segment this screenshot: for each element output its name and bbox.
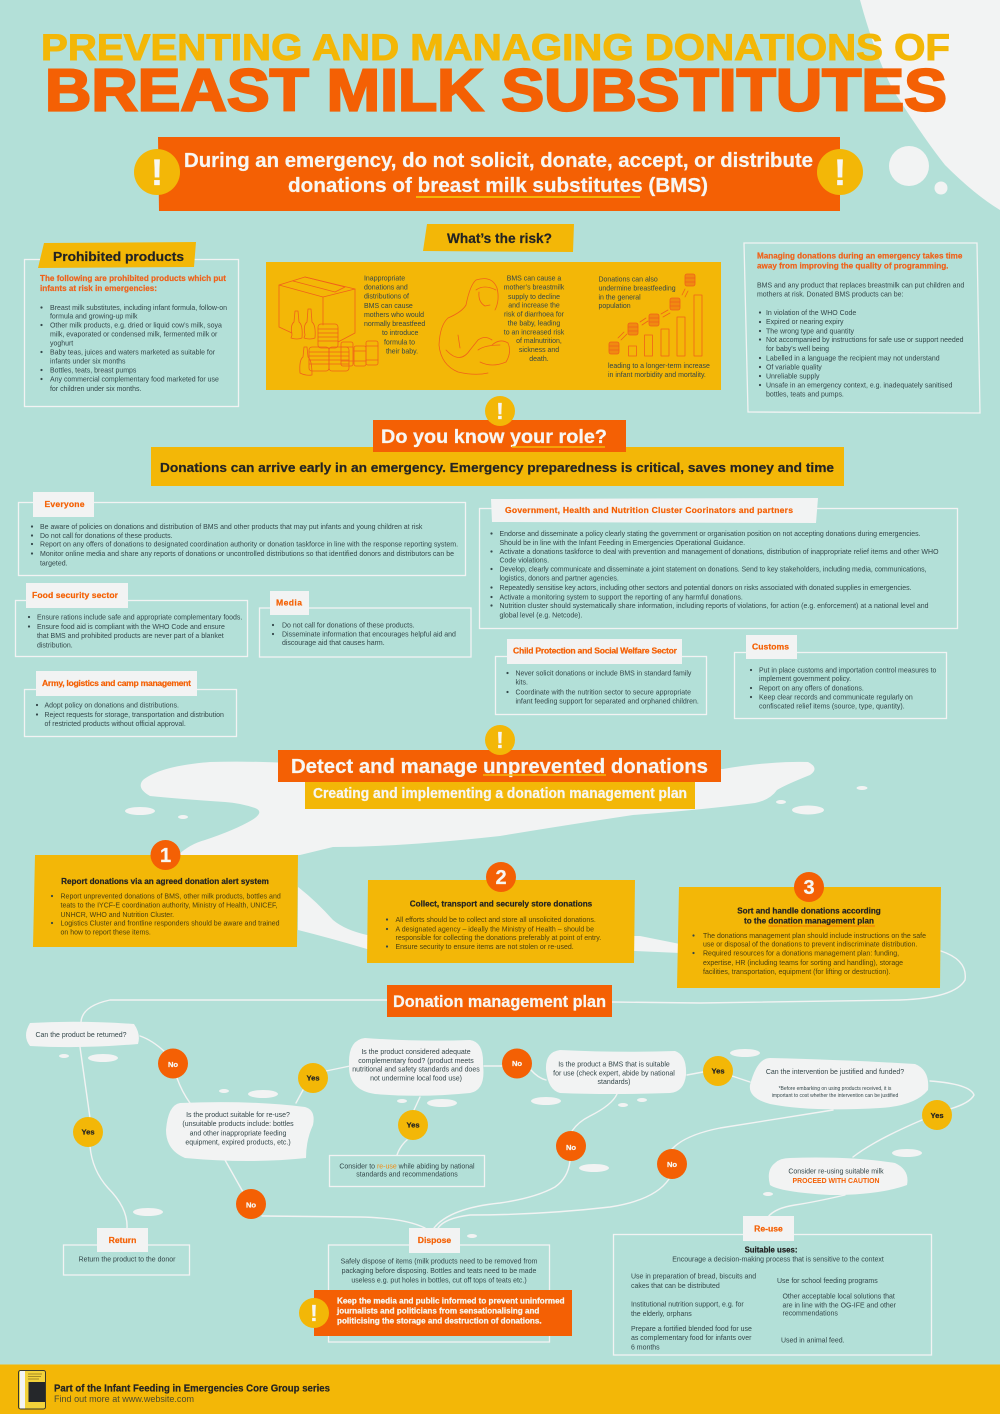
managing donations list: Labelled in a language the recipient may not understand <box>766 356 940 362</box>
panel: government and cluster coordinators: Nutrition cluster should systematically share information, including reports of violations, for action (e.g. enforcement) at a national level and <box>500 603 929 610</box>
panel: media: Disseminate information that encourages helpful aid and <box>282 632 456 638</box>
callout: keep media and public informed <box>299 1290 572 1336</box>
step 3: Required resources for a donations management plan: funding, <box>703 950 899 958</box>
decision nodes: no circles: No <box>512 1059 522 1068</box>
managing donations list <box>759 310 964 398</box>
managing donations heading: Managing donations during an emergency takes time <box>757 252 963 260</box>
panel: army, logistics and camp management: of restricted products without official approval. <box>44 721 186 728</box>
outcome: re-use: Other acceptable local solutions that <box>782 1294 895 1300</box>
panel: food security sector: Food security sector <box>32 590 119 600</box>
risk text 1: normally breastfeed <box>364 321 425 328</box>
decision: suitable for re-use: and other inappropriate feeding <box>190 1130 287 1138</box>
title: PREVENTING AND MANAGING DONATIONS OF <box>41 27 950 68</box>
decision nodes: yes circles: Yes <box>711 1066 725 1076</box>
risk text 3: Donations can also <box>598 276 658 284</box>
prohibited products intro: The following are prohibited products which put <box>40 274 226 283</box>
panel: everyone: Report on any offers of donations to designated coordination authority or donation taskforce in line with the response reporting system. <box>40 542 458 548</box>
section heading: do you know your role <box>373 396 626 452</box>
outcome: re-use: Institutional nutrition support, e.g. for <box>631 1302 744 1308</box>
panel: everyone: Do not call for donations of these products. <box>40 533 173 540</box>
decision: consider re-using suitable milk <box>769 1158 908 1195</box>
decision nodes: no circles: No <box>246 1200 256 1210</box>
outcome: re-use: the elderly, orphans <box>631 1311 692 1318</box>
panel: risk illustration <box>266 262 721 390</box>
decision nodes: yes circles: Yes <box>406 1120 420 1130</box>
decision: suitable for re-use: equipment, expired products, etc.) <box>185 1140 291 1146</box>
decision: adequate complementary food: not undermine local food use) <box>370 1076 462 1082</box>
prohibited products list: milk, evaporated or condensed milk, fermented milk or <box>50 332 218 338</box>
panel: government and cluster coordinators: Repeatedly sensitise key actors, including other sectors and potential donors on risks associated with donated supplies in emergencies. <box>500 585 912 592</box>
panel: customs: Put in place customs and importation control measures to <box>759 668 937 674</box>
step 1: Logistics Cluster and frontline responders should be aware and trained <box>60 920 280 928</box>
key message banner: During an emergency, do not solicit, donate, accept, or distribute <box>184 149 813 172</box>
risk text 1: their baby. <box>386 348 418 356</box>
callout: keep media and public informed: journalists and politicians from sensationalising and <box>336 1306 539 1316</box>
heading: donation management plan <box>387 985 612 1017</box>
panel: government and cluster coordinators: Should be in line with the Infant Feeding in Emergencies Operational Guidance. <box>500 540 745 547</box>
panel: food security sector: distribution. <box>37 642 73 650</box>
title: BREAST MILK SUBSTITUTES <box>45 58 947 124</box>
outcome: dispose <box>328 1228 550 1342</box>
risk text 1 <box>364 276 425 356</box>
key message banner: ! <box>151 152 163 193</box>
icon: rising bars and cans chart <box>609 274 702 356</box>
outcome: re-use <box>614 1216 932 1355</box>
icon: box of donated products <box>279 277 378 375</box>
step 3: use or disposal of the donations to prevent indiscriminate distribution. <box>703 942 917 948</box>
outcome: dispose: useless e.g. put holes in bottles, cut off tops of teats etc.) <box>351 1278 527 1284</box>
key message banner <box>134 137 863 211</box>
section heading: do you know your role: ! <box>496 398 504 424</box>
step 1: UNHCR, WHO and Nutrition Cluster. <box>60 912 174 919</box>
decision: BMS suitable for use: Is the product a BMS that is suitable <box>558 1062 670 1068</box>
panel: media <box>260 591 471 657</box>
panel: customs: Keep clear records and communicate regularly on <box>759 694 913 702</box>
outcome: re-use: Encourage a decision-making process that is sensitive to the context <box>672 1256 884 1264</box>
heading tab: what's the risk <box>423 224 574 252</box>
outcome: dispose: packaging before disposing. Bottles and teats need to be made <box>342 1268 537 1275</box>
callout: keep media and public informed: ! <box>310 1300 318 1326</box>
panel: government and cluster coordinators: Activate a monitoring system to support the reporting of any harmful donations. <box>500 594 743 602</box>
risk text 2: to an increased risk <box>504 330 565 336</box>
decision: adequate complementary food <box>349 1038 483 1096</box>
prohibited products list: for children under six months. <box>50 386 141 393</box>
decision: BMS suitable for use: for use (check expert, abide by national <box>553 1070 675 1078</box>
decision: intervention justified and funded: important to cost whether the intervention can be justified <box>772 1093 898 1099</box>
decision: adequate complementary food: nutritional and safety standards and does <box>352 1066 480 1074</box>
step 2: 2 <box>495 867 507 889</box>
risk text 3: undermine breastfeeding <box>598 286 676 292</box>
prohibited products list: yoghurt <box>50 340 73 348</box>
outcome: re-use: Re-use <box>754 1224 783 1234</box>
decision: intervention justified and funded: Can the intervention be justified and funded? <box>766 1069 904 1076</box>
panel: food security sector: Ensure rations include safe and appropriate complementary foods. <box>37 614 242 622</box>
decision: adequate complementary food: Is the product considered adequate <box>361 1049 471 1056</box>
section heading: do you know your role: Do you know your role? <box>381 426 607 448</box>
step 3 <box>677 872 941 988</box>
step 2: Collect, transport and securely store donations <box>410 900 593 908</box>
outcome: return: Return <box>109 1235 136 1245</box>
prohibited products list: infants under six months <box>50 358 126 366</box>
subheading: creating and implementing a plan: Creating and implementing a donation management plan <box>313 786 687 802</box>
panel: customs: Report on any offers of donations. <box>759 686 864 692</box>
flow lines connecting steps and decision tree <box>80 951 974 1228</box>
footer text: Part of the Infant Feeding in Emergencies Core Group series <box>54 1384 330 1394</box>
decision nodes: yes circles: Yes <box>81 1128 95 1136</box>
prohibited products list: formula and growing-up milk <box>50 314 138 320</box>
risk text 1: Inappropriate <box>364 276 405 282</box>
box: consider re-use <box>330 1156 484 1186</box>
risk text 3: in the general <box>598 294 641 302</box>
decision: adequate complementary food: complementary food? (product meets <box>358 1058 474 1065</box>
box: consider re-use: standards and recommendations <box>356 1172 458 1178</box>
managing donations intro: BMS and any product that replaces breastmilk can put children and <box>757 282 964 290</box>
step 1: on how to report these items. <box>60 930 151 936</box>
risk text 3: in infant morbidity and mortality. <box>608 372 706 379</box>
panel: customs: Customs <box>752 642 789 652</box>
outcome: re-use: Suitable uses: <box>745 1246 797 1254</box>
panel: everyone: Everyone <box>44 499 85 509</box>
prohibited products list: Breast milk substitutes, including infant formula, follow-on <box>50 305 227 312</box>
panel: army, logistics and camp management: Army, logistics and camp management <box>42 678 191 688</box>
risk text 2: BMS can cause a <box>507 276 561 282</box>
decision nodes: yes circles: Yes <box>306 1074 320 1082</box>
prohibited products intro: infants at risk in emergencies: <box>40 284 157 293</box>
managing donations list: The wrong type and quantity <box>766 328 854 336</box>
decorative milk stream behind detect and manage section <box>125 762 868 953</box>
decision nodes: no circles: No <box>667 1160 677 1169</box>
step 1: teats to the IYCF-E coordination authority, Ministry of Health, UNICEF, <box>60 902 278 910</box>
prohibited products intro <box>40 274 226 293</box>
managing donations list: Unreliable supply <box>766 374 820 380</box>
panel: child protection and social welfare: kits. <box>516 680 528 686</box>
risk text 3 <box>598 276 710 379</box>
managing donations list: In violation of the WHO Code <box>766 310 856 317</box>
managing donations heading <box>757 252 963 270</box>
managing donations list: for baby’s well being <box>766 346 829 353</box>
panel: media: Do not call for donations of these products. <box>282 622 415 630</box>
panel: government and cluster coordinators: global level (e.g. Netcode). <box>500 612 582 620</box>
risk text 2: supply to decline <box>508 294 560 301</box>
panel: food security sector: Ensure food aid is compliant with the WHO Code and ensure <box>37 624 225 631</box>
decision nodes: no circles: No <box>566 1143 576 1152</box>
decision: consider re-using suitable milk: Consider re-using suitable milk <box>788 1168 884 1176</box>
step 2: responsible for collecting the donations preferably at point of entry. <box>396 935 601 942</box>
managing donations list: bottles, teats and pumps. <box>766 392 844 398</box>
decision: suitable for re-use: (unsuitable products include: bottles <box>182 1121 294 1128</box>
decision: intervention justified and funded: *Before embarking on using products received, it is <box>779 1086 892 1092</box>
panel: government and cluster coordinators: Endorse and disseminate a policy clearly stating the government or organisation position on not accepting donations during emergencies. <box>500 531 921 538</box>
risk text 2: of malnutrition, <box>516 338 562 345</box>
outcome: re-use: are in line with the OG-IFE and other <box>782 1302 897 1310</box>
panel: army, logistics and camp management: Adopt policy on donations and distributions. <box>44 702 179 710</box>
panel: food security sector <box>16 583 248 656</box>
panel: customs <box>734 635 946 718</box>
managing donations list: Unsafe in an emergency context, e.g. inadequately sanitised <box>766 382 952 390</box>
step 3: 3 <box>803 877 815 899</box>
outcome: re-use: Used in animal feed. <box>781 1338 845 1344</box>
managing donations heading: away from improving the quality of programming. <box>757 262 948 270</box>
panel: government and cluster coordinators: Activate a donations taskforce to deal with prevention and management of donations, distribution of inappropriate relief items and other WHO <box>500 549 939 556</box>
outcome: dispose: Dispose <box>418 1235 451 1245</box>
panel: everyone: Be aware of policies on donations and distribution of BMS and other products that may put infants and young children at risk <box>40 524 423 531</box>
title <box>41 27 950 124</box>
risk text 1: formula to <box>384 340 415 346</box>
panel: government and cluster coordinators: Develop, clearly communicate and disseminate a joint statement on donations. Send to key stakeholders, including media, communications, <box>500 566 927 574</box>
callout: keep media and public informed: Keep the media and public informed to prevent uninformed <box>337 1296 565 1306</box>
panel: everyone <box>18 492 466 576</box>
outcome: re-use: as complementary food for infants over <box>631 1335 752 1342</box>
risk text 2 <box>504 276 565 363</box>
step 1: Report unprevented donations of BMS, other milk products, bottles and <box>60 894 281 900</box>
footer text: Find out more at www.website.com <box>54 1394 194 1404</box>
managing donations intro <box>757 282 964 298</box>
managing donations list: Of variable quality <box>766 364 822 372</box>
outcome: re-use: Use in preparation of bread, biscuits and <box>631 1274 756 1280</box>
outcome: re-use: recommendations <box>782 1310 838 1318</box>
outcome: re-use: cakes that can be distributed <box>631 1283 720 1290</box>
preparedness banner <box>151 447 844 486</box>
risk text 3: leading to a longer-term increase <box>608 363 710 370</box>
step 2: Ensure security to ensure items are not stolen or re-used. <box>396 944 574 951</box>
step 1: 1 <box>160 845 171 867</box>
decorative droplets around flowchart <box>59 1049 922 1238</box>
step 3: Sort and handle donations according <box>737 906 881 916</box>
managing donations intro: mothers at risk. Donated BMS products can be: <box>757 292 903 298</box>
section heading: detect and manage <box>278 725 721 782</box>
panel: government and cluster coordinators: Code violations. <box>500 558 549 564</box>
panel: child protection and social welfare: infant feeding support for separated and orphaned children. <box>516 698 699 706</box>
prohibited products list <box>40 305 227 393</box>
preparedness banner: Donations can arrive early in an emergency. Emergency preparedness is critical, saves money and time <box>160 460 834 475</box>
panel: child protection and social welfare: Coordinate with the nutrition sector to secure appropriate <box>516 690 691 696</box>
risk text 1: donations and <box>364 284 408 292</box>
risk text 2: death. <box>529 356 549 363</box>
key message banner: donations of breast milk substitutes (BMS) <box>288 174 708 197</box>
risk text 2: the baby, leading <box>508 320 560 328</box>
callout: keep media and public informed: politicising the storage and destruction of donations. <box>337 1316 542 1326</box>
step 3: to the donation management plan <box>744 916 874 926</box>
outcome: return <box>64 1228 190 1275</box>
panel: child protection and social welfare: Child Protection and Social Welfare Sector <box>513 646 678 656</box>
managing donations list: Not accompanied by instructions for safe use or support needed <box>766 337 964 344</box>
risk text 2: and increase the <box>508 302 560 310</box>
step 3: The donations management plan should include instructions on the safe <box>703 933 926 940</box>
panel: customs: implement government policy. <box>759 676 851 683</box>
decision: consider re-using suitable milk: PROCEED WITH CAUTION <box>793 1178 879 1185</box>
prohibited products list: Baby teas, juices and waters marketed as suitable for <box>50 350 216 356</box>
panel: everyone: targeted. <box>40 560 68 568</box>
panel: food security sector: that BMS and prohibited products are never part of a blanket <box>37 633 224 640</box>
decision nodes: yes circles: Yes <box>930 1111 944 1120</box>
decision nodes: no circles <box>158 1048 687 1219</box>
decision nodes: yes circles <box>73 1056 952 1147</box>
heading tab: what's the risk: What’s the risk? <box>447 231 552 246</box>
box: consider re-use: Consider to re-use while abiding by national <box>339 1164 475 1170</box>
risk text 2: risk of diarrhoea for <box>504 312 565 318</box>
risk text 1: distributions of <box>364 294 409 300</box>
key message banner: ! <box>834 152 846 193</box>
risk text 3: population <box>598 303 631 310</box>
panel: media: discourage aid that causes harm. <box>282 640 385 647</box>
icon: book <box>18 1370 46 1409</box>
panel: army, logistics and camp management: Reject requests for storage, transportation and distribution <box>44 712 224 719</box>
section heading: detect and manage: Detect and manage unprevented donations <box>291 756 708 778</box>
icon: breastfeeding mother <box>439 279 510 374</box>
outcome: dispose: Safely dispose of items (milk products need to be removed from <box>341 1258 538 1266</box>
risk text 1: mothers who would <box>364 312 424 319</box>
outcome: re-use: Prepare a fortified blended food for use <box>631 1326 752 1333</box>
heading tab: prohibited products: Prohibited products <box>53 249 184 264</box>
panel: child protection and social welfare: Never solicit donations or include BMS in standard family <box>516 670 692 678</box>
decision: can the product be returned: Can the product be returned? <box>35 1032 127 1039</box>
outcome: re-use: 6 months <box>631 1344 660 1352</box>
step 2: A designated agency – ideally the Ministry of Health – should be <box>396 926 594 934</box>
panel: prohibited products <box>24 242 238 406</box>
subheading: creating and implementing a plan <box>305 781 695 809</box>
decorative white milk blob, top right <box>860 0 1000 210</box>
risk text 1: BMS can cause <box>364 303 413 310</box>
panel: managing donations <box>744 243 980 413</box>
risk text 2: mother’s breastmilk <box>504 284 565 292</box>
footer <box>0 1364 1000 1414</box>
prohibited products list: Other milk products, e.g. dried or liquid cow’s milk, soya <box>50 322 222 330</box>
step 1 <box>33 840 298 947</box>
prohibited products list: Bottles, teats, breast pumps <box>50 368 137 374</box>
panel: government and cluster coordinators: logistics, donors and partner agencies. <box>500 576 619 582</box>
step 3: expertise, HR (including teams for sorting and handling), storage <box>703 960 903 967</box>
decision: can the product be returned <box>26 1022 139 1047</box>
section heading: detect and manage: ! <box>496 727 504 753</box>
panel: army, logistics and camp management <box>24 671 236 736</box>
managing donations list: Expired or nearing expiry <box>766 319 844 326</box>
decision: suitable for re-use <box>166 1102 314 1161</box>
heading: donation management plan: Donation management plan <box>393 993 606 1011</box>
panel: government and cluster coordinators <box>480 498 958 628</box>
panel: child protection and social welfare <box>496 639 706 714</box>
panel: government and cluster coordinators: Government, Health and Nutrition Cluster Coorinators and partners <box>505 505 793 515</box>
step 2: All efforts should be to collect and store all unsolicited donations. <box>396 917 596 924</box>
decision: intervention justified and funded <box>750 1058 928 1109</box>
step 2 <box>367 862 635 963</box>
step 3: facilities, transportation, equipment (for lifting or destruction). <box>703 969 891 976</box>
prohibited products list: Any commercial complementary food marketed for use <box>50 376 219 384</box>
panel: customs: confiscated relief items (source, type, quantity). <box>759 704 905 710</box>
outcome: return: Return the product to the donor <box>79 1256 176 1264</box>
outcome: re-use: Use for school feeding programs <box>777 1278 878 1285</box>
risk text 2: sickness and <box>519 347 559 354</box>
decision: suitable for re-use: Is the product suitable for re-use? <box>186 1112 290 1119</box>
panel: media: Media <box>276 598 302 608</box>
panel: everyone: Monitor online media and share any reports of donations or uncontrolled distributions so that identified donors and distributors can be <box>40 551 454 558</box>
risk text 1: to introduce <box>382 330 419 337</box>
decision: BMS suitable for use: standards) <box>598 1079 630 1086</box>
decision nodes: no circles: No <box>168 1060 178 1069</box>
heading tab: prohibited products <box>38 242 196 268</box>
decision: BMS suitable for use <box>546 1050 686 1094</box>
step 1: Report donations via an agreed donation alert system <box>61 877 269 886</box>
footer text <box>54 1384 330 1404</box>
